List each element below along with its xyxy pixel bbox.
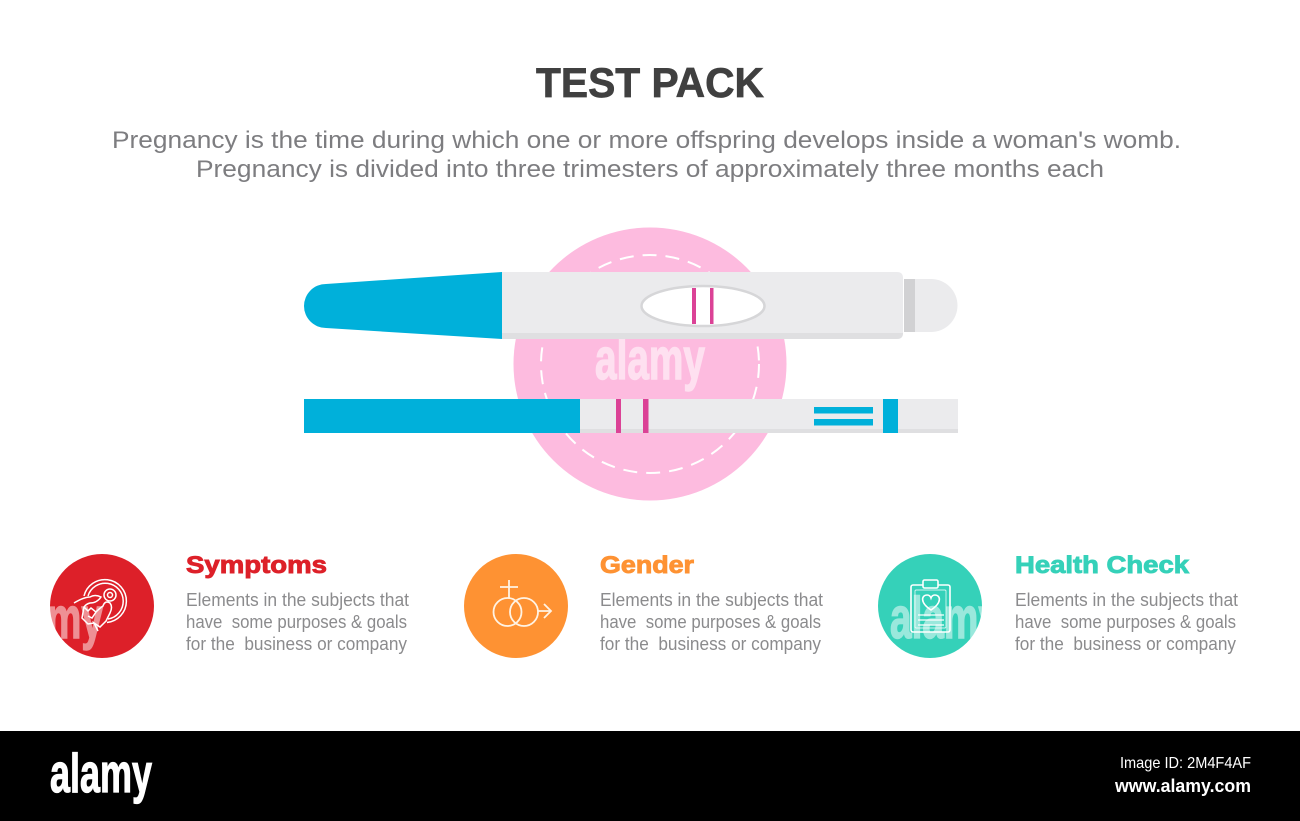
image id: Image ID: 2M4F4AF [1120,755,1251,772]
heading: Symptoms [186,552,327,579]
item: health check [878,552,1238,658]
subtitle text [112,127,1181,183]
description: for the business or company [186,634,407,654]
description: for the business or company [1015,634,1236,654]
title: TEST PACK [536,59,764,106]
strip blue markings [814,399,898,433]
subtitle text: Pregnancy is the time during which one or more offspring develops inside a woman's womb. [112,127,1181,154]
result window with two lines [642,286,764,326]
strip blue end [304,399,580,433]
description [600,590,823,654]
website: www.alamy.com [1114,776,1251,796]
mask outside circle [980,590,1005,650]
description: Elements in the subjects that [186,590,409,610]
heading: Health Check [1015,552,1190,579]
icon: gender symbols in orange circle [464,554,568,658]
item: symptoms [0,552,409,658]
item: gender [464,552,823,658]
device blue handle [304,272,502,339]
description: have some purposes & goals [1015,612,1236,632]
description: Elements in the subjects that [1015,590,1238,610]
footer bar [0,731,1300,821]
device cap [904,279,958,332]
footer logo: alamy [50,742,152,804]
description: have some purposes & goals [186,612,407,632]
strip result lines [616,399,648,433]
icon: clipboard heart in teal circle [878,554,1005,658]
description: Elements in the subjects that [600,590,823,610]
subtitle text: Pregnancy is divided into three trimesters of approximately three months each [196,156,1104,183]
description [186,590,409,654]
pink background circle [514,228,786,500]
icon: uterus in red circle [0,554,154,658]
description: have some purposes & goals [600,612,821,632]
description [1015,590,1238,654]
heading: Gender [600,552,694,579]
watermark fragment: alamy [890,586,1000,651]
test strip [304,399,958,433]
watermark centre: alamy [595,327,705,392]
pregnancy test device [304,272,958,339]
description: for the business or company [600,634,821,654]
device body [502,272,903,339]
